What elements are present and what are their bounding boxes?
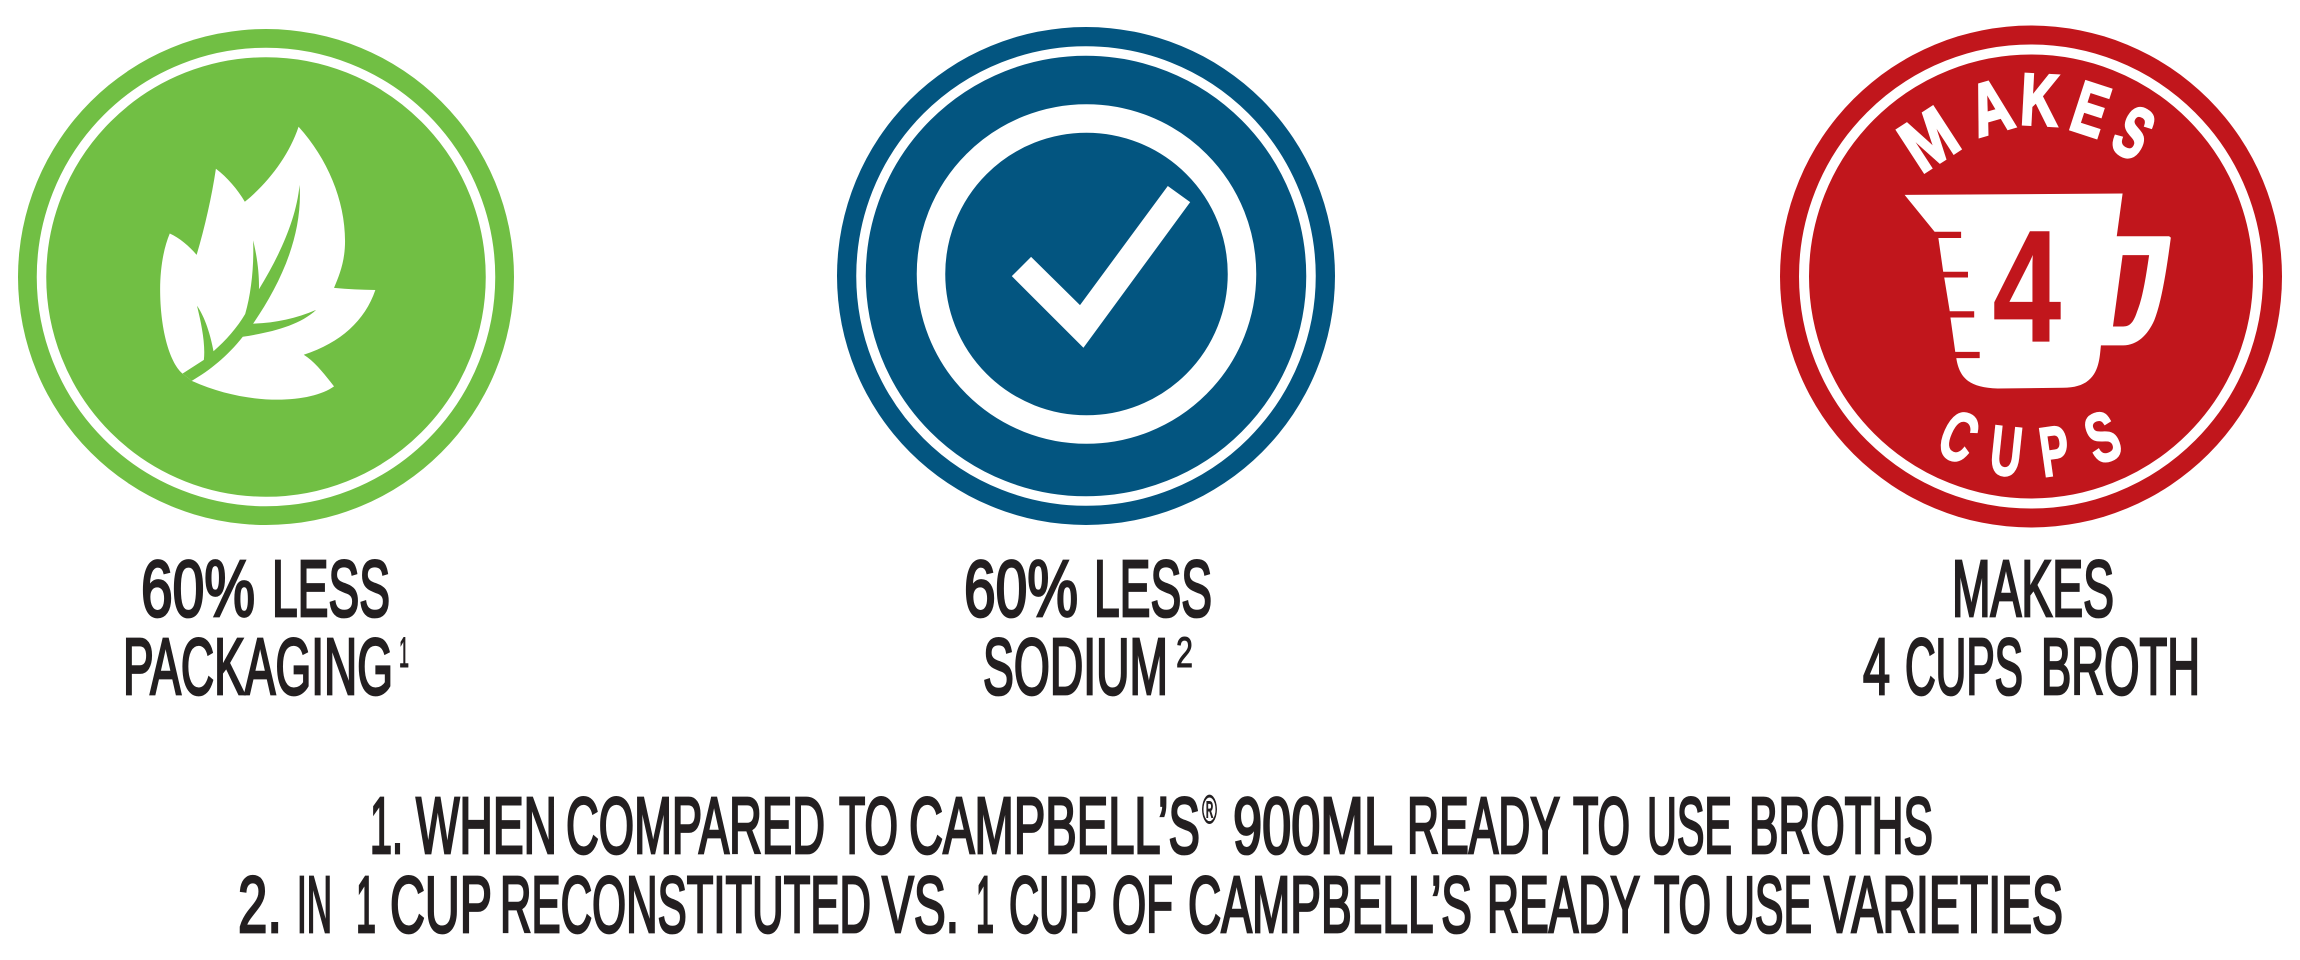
badge text: CUPS: S	[2075, 395, 2131, 480]
footnote 1	[370, 781, 1933, 870]
caption: 60% less packaging	[123, 544, 409, 711]
footnote 1: ®	[1202, 788, 1217, 832]
caption: 60% less sodium: LESS	[1094, 544, 1212, 633]
footnote 2: 1	[356, 860, 376, 949]
footnote 2: CUP	[1009, 860, 1097, 949]
badge text: CUPS: P	[2035, 411, 2074, 492]
footnote 2: CAMPBELL’S	[1188, 860, 1472, 949]
badge text: MAKES: K	[2019, 59, 2061, 142]
caption: 60% less packaging: 60%	[141, 544, 255, 633]
footnote 2: RECONSTITUTED	[500, 860, 871, 949]
badge text: MAKES: E	[2062, 66, 2119, 154]
footnote 1: WHEN	[416, 781, 557, 870]
badge text: CUPS: U	[1986, 411, 2026, 492]
badge text: CUPS	[1927, 394, 2131, 492]
icon: measuring cup	[1905, 194, 2171, 388]
footnote 2: CUP	[390, 860, 492, 949]
icon: red measuring cup badge	[1780, 26, 2282, 528]
badge text: MAKES	[1886, 59, 2167, 188]
footnote 1: USE	[1647, 781, 1732, 870]
footnote 2: VS.	[882, 860, 959, 949]
badge text: MAKES: M	[1886, 92, 1973, 188]
footnote 1: COMPARED	[566, 781, 825, 870]
caption: 60% less sodium: 2	[1176, 629, 1193, 677]
footnote 1: 1.	[370, 781, 403, 870]
footnote 2: IN	[297, 860, 332, 949]
icon: leaf	[160, 127, 375, 400]
caption: 60% less packaging: LESS	[272, 544, 390, 633]
footnote 1: TO	[1573, 781, 1630, 870]
footnote 2: VARIETIES	[1824, 860, 2063, 949]
footnote 2: TO	[1654, 860, 1711, 949]
footnote 1: TO	[839, 781, 898, 870]
footnote 1: CAMPBELL’S	[909, 781, 1200, 870]
text: 1	[399, 629, 409, 677]
caption: 60% less sodium: 60%	[964, 544, 1078, 633]
footnote 1: 900ML	[1233, 781, 1393, 870]
icon: check mark	[1012, 186, 1190, 348]
footnote 1: READY	[1407, 781, 1560, 870]
badge text: MAKES: S	[2100, 90, 2167, 176]
badge text: CUPS: C	[1927, 394, 1990, 479]
footnote 2: OF	[1112, 860, 1173, 949]
caption: 60% less sodium	[964, 544, 1212, 711]
footnote 2	[238, 860, 2063, 949]
footnote 2: READY	[1487, 860, 1640, 949]
footnote 1: BROTHS	[1749, 781, 1933, 870]
caption: 60% less packaging: PACKAGING	[123, 622, 393, 711]
footnote 2: USE	[1724, 860, 1812, 949]
caption: makes 4 cups broth	[1863, 544, 2200, 711]
icon: green leaf badge	[18, 29, 514, 525]
caption: makes 4 cups broth: CUPS	[1905, 622, 2023, 711]
caption: 60% less sodium: SODIUM	[983, 622, 1168, 711]
icon: blue check badge	[837, 27, 1335, 525]
cup number: 4: 4	[1993, 197, 2061, 375]
caption: makes 4 cups broth: 4	[1863, 622, 1890, 711]
badge text: MAKES: A	[1960, 62, 2021, 152]
caption: makes 4 cups broth: MAKES	[1952, 544, 2114, 633]
footnote 2: 2.	[238, 860, 282, 949]
footnote 2: 1	[976, 860, 994, 949]
